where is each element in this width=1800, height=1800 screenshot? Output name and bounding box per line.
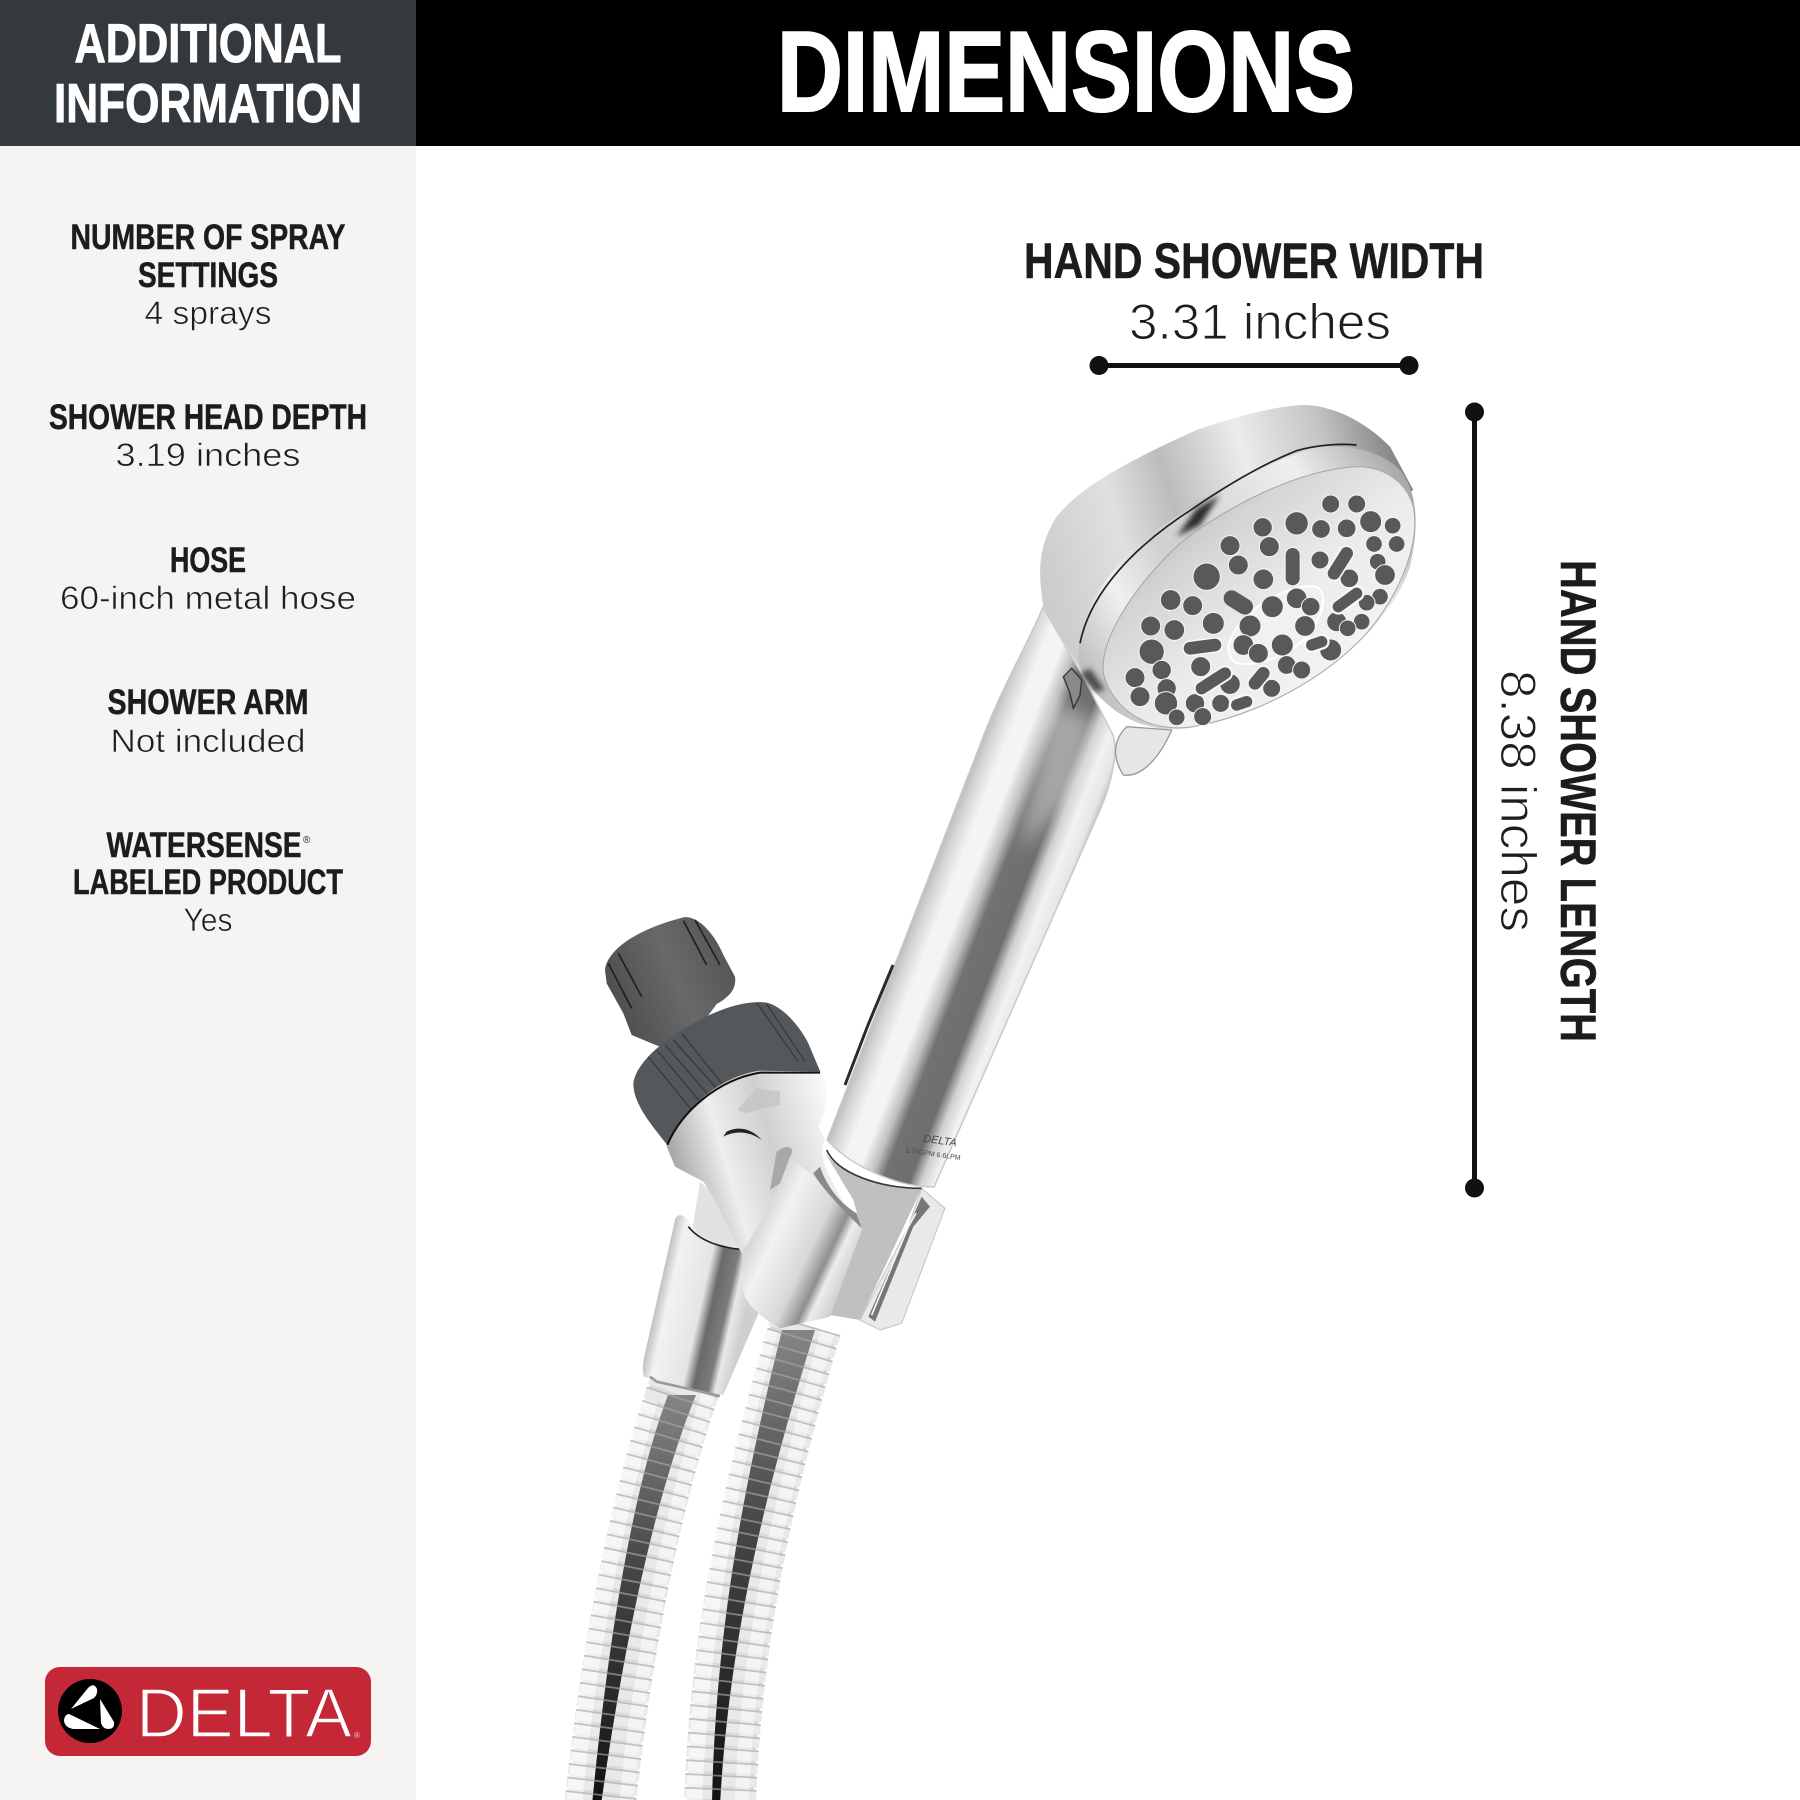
hose: left bbox=[574, 1385, 708, 1800]
swivel collar bbox=[633, 1002, 822, 1145]
dimension: hand shower width: HAND SHOWER WIDTH bbox=[1024, 233, 1484, 289]
mount body and knobs bbox=[605, 917, 922, 1328]
text block: shower arm: Not included bbox=[110, 723, 306, 759]
text block: hose: HOSE bbox=[170, 541, 246, 580]
handle edge reflection bbox=[845, 965, 893, 1085]
text block: watersense labeled product: ® bbox=[303, 835, 311, 846]
hose connector bbox=[643, 1182, 760, 1396]
text block: number of spray settings bbox=[70, 218, 346, 331]
header: additional information bbox=[0, 0, 416, 146]
dimension: hand shower length: 8.38 inches bbox=[1490, 670, 1546, 932]
text block: watersense labeled product: Yes bbox=[184, 902, 232, 938]
slot nozzles bbox=[1190, 553, 1357, 705]
text block: watersense labeled product bbox=[73, 826, 343, 938]
header: additional information: ADDITIONAL bbox=[74, 12, 342, 74]
logo: Delta: ® bbox=[354, 1731, 360, 1740]
center recess bbox=[1228, 586, 1323, 664]
text block: hose bbox=[60, 541, 356, 616]
text block: shower arm: SHOWER ARM bbox=[108, 683, 308, 722]
dimension: hand shower width: 3.31 inches bbox=[1129, 294, 1391, 350]
logo: Delta bbox=[45, 1667, 371, 1756]
handle upper highlight bbox=[1020, 700, 1095, 850]
text block: hose: 60-inch metal hose bbox=[60, 580, 356, 616]
handle lettering bbox=[905, 1131, 963, 1162]
dimension: hand shower length bbox=[1465, 402, 1606, 1198]
header: additional information: INFORMATION bbox=[54, 72, 362, 134]
handle collar ring bbox=[827, 1150, 922, 1188]
text block: number of spray settings: SETTINGS bbox=[138, 256, 278, 295]
text block: watersense labeled product: LABELED PRODUCT bbox=[73, 863, 343, 902]
panel: additional information sidebar bbox=[0, 146, 416, 1800]
text block: shower head depth: SHOWER HEAD DEPTH bbox=[49, 398, 367, 437]
text block: shower arm bbox=[108, 683, 308, 759]
spray nozzles bbox=[1125, 495, 1405, 726]
pivot pin bbox=[1063, 668, 1082, 708]
mount and handle base bbox=[643, 1150, 945, 1396]
handle lettering: 1.75GPM 6.6LPM bbox=[905, 1147, 961, 1162]
text block: number of spray settings: NUMBER OF SPRAY bbox=[70, 218, 346, 257]
trigger lever bbox=[1116, 727, 1172, 775]
shower head bbox=[1040, 405, 1416, 775]
dimension: hand shower length: HAND SHOWER LENGTH bbox=[1550, 560, 1606, 1042]
header: dimensions bbox=[416, 0, 1800, 146]
handle bbox=[827, 607, 1115, 1187]
spray face plate bbox=[1103, 467, 1415, 728]
logo: Delta: DELTA bbox=[136, 1674, 352, 1752]
dimension: hand shower width bbox=[1024, 233, 1484, 375]
chrome ring bbox=[1078, 444, 1416, 729]
hose: right bbox=[694, 1325, 828, 1800]
hose clip bbox=[860, 1188, 945, 1330]
header: dimensions: DIMENSIONS bbox=[777, 9, 1355, 136]
text block: shower head depth bbox=[49, 398, 367, 473]
head back shell bbox=[1040, 405, 1413, 680]
product: hand shower bbox=[574, 405, 1416, 1800]
text block: shower head depth: 3.19 inches bbox=[116, 437, 300, 473]
text block: number of spray settings: 4 sprays bbox=[144, 295, 272, 331]
lower handle sleeve bbox=[823, 1150, 922, 1320]
text block: watersense labeled product: WATERSENSE bbox=[106, 826, 302, 865]
handle lettering: DELTA bbox=[922, 1133, 957, 1149]
swivel and holder bbox=[667, 1071, 862, 1328]
arm dial bbox=[605, 917, 735, 1047]
